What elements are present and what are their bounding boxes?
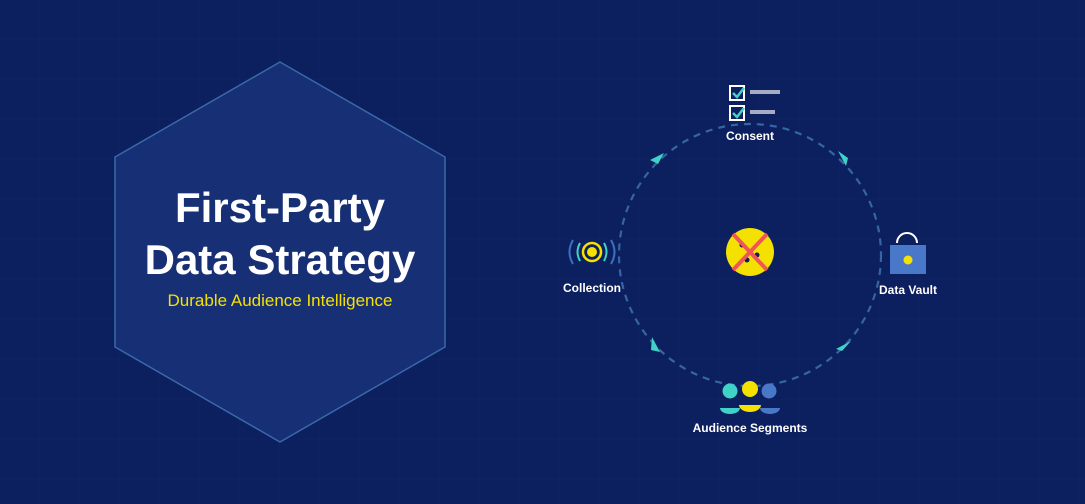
node: data vault: Data Vault bbox=[879, 283, 937, 297]
panel: hexagon title bbox=[115, 62, 445, 442]
node: collection: Collection bbox=[563, 281, 621, 295]
icon: center blocked cookie bbox=[726, 228, 774, 276]
arrows bbox=[650, 151, 851, 352]
node: consent: Consent bbox=[726, 129, 774, 143]
node: audience segments bbox=[693, 381, 808, 435]
cycle diagram bbox=[563, 86, 937, 435]
title: First-Party bbox=[175, 184, 386, 231]
title line 2: Data Strategy bbox=[145, 236, 416, 283]
subtitle: Durable Audience Intelligence bbox=[168, 291, 392, 310]
node: audience segments: Audience Segments bbox=[693, 421, 808, 435]
node: collection bbox=[563, 240, 621, 295]
node: data vault bbox=[879, 233, 937, 297]
node: consent bbox=[726, 86, 780, 143]
